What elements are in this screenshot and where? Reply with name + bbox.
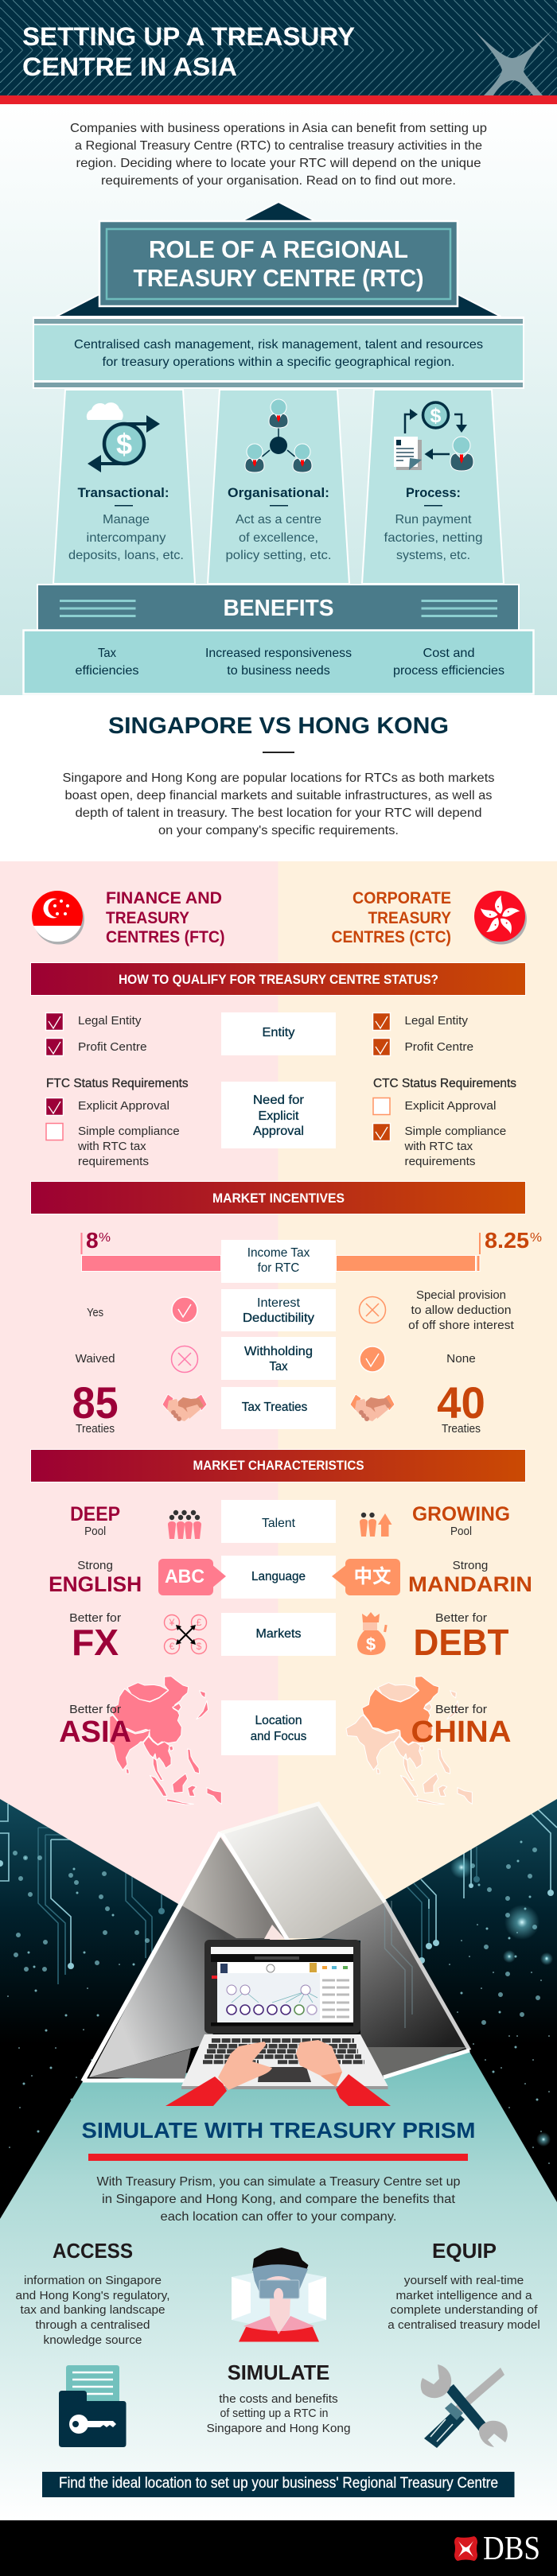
label box: need for explicit approval: Approval xyxy=(253,1125,304,1138)
row: interest deductibility xyxy=(87,1288,515,1332)
label box: entity: Entity xyxy=(263,1026,294,1039)
text block: equip xyxy=(388,2239,540,2332)
checklist: FTC status requirements: with RTC tax xyxy=(77,1140,146,1153)
row: language: MANDARIN xyxy=(408,1572,532,1596)
row: location and focus: Location xyxy=(255,1714,302,1727)
text block: comparison intro: boast open, deep financial markets and suitable infrastructures, as well as xyxy=(65,789,492,802)
panel: teal lower background xyxy=(0,2050,557,2520)
icon: process cycle xyxy=(394,402,473,471)
panel: role heading plaque: TREASURY CENTRE (RTC) xyxy=(134,265,423,292)
illustration: laptop with Treasury Prism dashboard xyxy=(166,1940,391,2106)
text block: equip: complete understanding of xyxy=(390,2303,538,2317)
panel: pillar transactional xyxy=(53,390,195,584)
checklist: CTC status requirements: requirements xyxy=(404,1155,476,1168)
bar chart: income tax Hong Kong 8.25% xyxy=(336,1228,542,1271)
row: interest deductibility: Special provision xyxy=(416,1288,506,1302)
row: tax treaties: Treaties xyxy=(76,1422,115,1436)
text block: access: through a centralised xyxy=(35,2318,150,2332)
panel: definition beam xyxy=(33,317,524,389)
row: location and focus: Better for xyxy=(435,1703,487,1716)
panel: pillar process: Run payment xyxy=(395,513,472,526)
label box: income tax: for RTC xyxy=(258,1261,299,1275)
icon: Chinese speech bubble: 中文 xyxy=(353,1565,391,1587)
checklist: Singapore entity xyxy=(46,1013,147,1056)
panel: pillar organisational xyxy=(208,390,349,584)
row: language: ENGLISH xyxy=(49,1572,142,1596)
heading: simulate with treasury prism: SIMULATE WITH TREASURY PRISM xyxy=(81,2118,476,2143)
heading: corporate treasury centres: TREASURY xyxy=(368,909,451,927)
icon: dollar exchange: $ xyxy=(116,428,132,460)
text block: simulate intro xyxy=(97,2175,461,2224)
label box: need for explicit approval: Explicit xyxy=(258,1109,299,1123)
heading: Singapore vs Hong Kong: SINGAPORE VS HONG KONG xyxy=(108,713,449,739)
Singapore flag badge xyxy=(32,891,84,945)
row: location and focus: Better for xyxy=(69,1703,121,1716)
label box: entity xyxy=(221,1012,336,1055)
header banner xyxy=(0,0,557,104)
text block: simulate intro: in Singapore and Hong Kong, and compare the benefits that xyxy=(102,2193,456,2206)
heading: corporate treasury centres: CORPORATE xyxy=(353,889,451,907)
bar chart: income tax Singapore 8% xyxy=(81,1228,221,1271)
checklist: Hong Kong entity: Profit Centre xyxy=(404,1040,473,1054)
icon: currency exchange: £ xyxy=(197,1617,202,1628)
call to action bar: Find the ideal location to set up your business' Regional Treasury Centre xyxy=(59,2475,498,2492)
row: interest deductibility: Interest xyxy=(257,1296,301,1310)
banner: how to qualify: HOW TO QUALIFY FOR TREASURY CENTRE STATUS? xyxy=(119,973,438,987)
title xyxy=(22,22,355,81)
bar chart: income tax Hong Kong 8.25%: 8.25 xyxy=(485,1228,529,1253)
text block: comparison intro: on your company's specific requirements. xyxy=(158,824,399,837)
text block: simulate: of setting up a RTC in xyxy=(220,2407,328,2420)
panel: benefits list: efficiencies xyxy=(75,664,138,678)
panel: benefits list: Cost and xyxy=(423,647,474,660)
panel: temple roof xyxy=(56,202,501,317)
text block: access: knowledge source xyxy=(43,2333,142,2347)
intro text: Companies with business operations in Asia can benefit from setting up xyxy=(70,122,487,135)
label box: income tax xyxy=(221,1240,336,1283)
row: talent: GROWING xyxy=(412,1503,510,1525)
icon: DBS star mark xyxy=(470,26,556,95)
icon: dollar exchange xyxy=(87,402,160,472)
panel: role heading plaque xyxy=(99,221,458,306)
row: tax treaties: Tax Treaties xyxy=(242,1401,307,1414)
row: language xyxy=(49,1556,532,1599)
row: interest deductibility: Yes xyxy=(87,1306,103,1319)
panel: pillar transactional: Transactional: xyxy=(78,485,169,500)
heading: corporate treasury centres xyxy=(331,889,451,946)
row: language: Strong xyxy=(453,1559,488,1572)
row: location and focus: ASIA xyxy=(59,1715,131,1749)
icon: ABC speech bubble xyxy=(158,1559,226,1595)
text block: equip: EQUIP xyxy=(432,2239,497,2263)
text block: simulate: Singapore and Hong Kong xyxy=(207,2422,350,2435)
bar chart: income tax Singapore 8%: % xyxy=(99,1231,111,1245)
row: withholding tax xyxy=(76,1337,476,1380)
intro text: requirements of your organisation. Read on to find out more. xyxy=(101,174,456,188)
row: markets: Better for xyxy=(435,1611,487,1625)
icon: folder with key xyxy=(59,2365,126,2447)
row: location and focus: and Focus xyxy=(251,1730,306,1743)
map: Asia, Singapore focus xyxy=(110,1676,222,1805)
banner: market characteristics xyxy=(30,1449,525,1482)
icon: deep talent pool xyxy=(168,1510,201,1539)
logo: DBS: DBS xyxy=(483,2531,540,2567)
text block: access: ACCESS xyxy=(53,2239,133,2263)
row: markets: Markets xyxy=(256,1627,301,1641)
panel: benefits list: process efficiencies xyxy=(393,664,504,678)
heading: finance and treasury centres xyxy=(106,889,224,946)
banner: market characteristics: MARKET CHARACTERISTICS xyxy=(193,1459,364,1473)
row: tax treaties: Treaties xyxy=(442,1422,481,1436)
row: interest deductibility: to allow deduction xyxy=(411,1304,511,1317)
icon: currency exchange xyxy=(164,1614,207,1654)
icon: currency exchange: € xyxy=(169,1641,175,1652)
panel: definition beam: for treasury operations within a specific geographical region. xyxy=(102,356,455,369)
panel: pillar process xyxy=(362,390,504,584)
map: Asia, China focus xyxy=(346,1677,472,1805)
panel: pillar process: systems, etc. xyxy=(396,549,470,562)
panel: dark simulation background with circuits and stars xyxy=(0,1793,557,2239)
text block: equip: market intelligence and a xyxy=(396,2289,532,2302)
checklist: CTC status requirements: Explicit Approval xyxy=(404,1099,497,1113)
circuit lines xyxy=(38,1828,477,1984)
text block: comparison intro xyxy=(62,771,495,837)
text block: simulate intro: each location can offer to your company. xyxy=(161,2210,396,2224)
icon: wrench and screwdriver xyxy=(421,2364,508,2448)
panel: pillar process: factories, netting xyxy=(384,531,482,545)
text block: equip: yourself with real-time xyxy=(404,2274,524,2287)
row: talent: DEEP xyxy=(70,1503,120,1525)
banner: market incentives xyxy=(30,1182,525,1214)
row: withholding tax: Waived xyxy=(76,1352,115,1366)
text block: comparison intro: Singapore and Hong Kong are popular locations for RTCs as both markets xyxy=(62,771,495,785)
checklist: CTC status requirements: with RTC tax xyxy=(403,1140,473,1153)
intro text: a Regional Treasury Centre (RTC) to centralise treasury activities in the xyxy=(75,139,482,153)
checklist: FTC status requirements: Explicit Approval xyxy=(78,1099,169,1113)
text block: equip: a centralised treasury model xyxy=(388,2318,540,2332)
logo: DBS xyxy=(454,2531,540,2567)
checklist: Hong Kong entity: Legal Entity xyxy=(404,1014,469,1028)
laptop screen xyxy=(204,1940,360,2034)
heading: finance and treasury centres: CENTRES (FTC) xyxy=(106,928,224,946)
panel: pillar organisational: Organisational: xyxy=(228,485,329,500)
panel: benefits bar: BENEFITS xyxy=(223,596,334,621)
row: language: Strong xyxy=(77,1559,113,1572)
checklist: CTC status requirements: Simple compliance xyxy=(404,1125,506,1138)
checklist: Hong Kong entity xyxy=(372,1013,473,1056)
text block: access: and Hong Kong's regulatory, xyxy=(16,2289,170,2302)
title: CENTRE IN ASIA xyxy=(22,52,237,81)
panel: benefits list: Increased responsiveness xyxy=(205,647,352,660)
row: tax treaties xyxy=(72,1377,485,1436)
row: markets: Better for xyxy=(69,1611,121,1625)
row: tax treaties: 85 xyxy=(72,1377,119,1428)
row: withholding tax: Tax xyxy=(269,1360,288,1373)
checklist: FTC status requirements: requirements xyxy=(78,1155,149,1168)
text block: comparison intro: depth of talent in treasury. The best location for your RTC will depend xyxy=(75,806,482,820)
row: talent xyxy=(70,1500,510,1543)
heading: simulate with treasury prism xyxy=(81,2118,476,2161)
row: markets xyxy=(69,1611,509,1663)
panel: definition beam: Centralised cash management, risk management, talent and resources xyxy=(74,338,483,352)
panel: pillar transactional: intercompany xyxy=(86,531,166,545)
row: markets: FX xyxy=(72,1622,119,1663)
panel: pillar transactional: Manage xyxy=(103,513,150,526)
text block: access: information on Singapore xyxy=(24,2274,162,2287)
row: language: Language xyxy=(251,1570,306,1583)
text block: simulate: the costs and benefits xyxy=(219,2392,338,2406)
bar chart: income tax Singapore 8%: 8 xyxy=(86,1228,99,1253)
panel: pillar organisational: policy setting, etc. xyxy=(226,549,331,562)
icon: handshake xyxy=(162,1394,207,1421)
text block: simulate xyxy=(207,2360,350,2435)
icon: currency exchange: ¥ xyxy=(169,1617,175,1628)
intro text xyxy=(70,122,487,188)
text block: simulate: SIMULATE xyxy=(228,2360,329,2384)
row: interest deductibility: Deductibility xyxy=(243,1311,314,1325)
row: talent: Talent xyxy=(262,1517,296,1530)
checklist: FTC status requirements: Simple compliance xyxy=(78,1125,180,1138)
row: markets: DEBT xyxy=(414,1622,509,1663)
icon: process cycle: $ xyxy=(430,405,442,427)
checklist: Singapore entity: Legal Entity xyxy=(78,1014,142,1028)
row: withholding tax: Withholding xyxy=(244,1345,313,1358)
row: location and focus: CHINA xyxy=(411,1715,511,1749)
text block: access xyxy=(16,2239,170,2347)
heading: finance and treasury centres: FINANCE AND xyxy=(106,889,222,907)
label box: income tax: Income Tax xyxy=(247,1246,310,1260)
icon: handshake xyxy=(350,1394,395,1421)
row: talent: Pool xyxy=(84,1525,106,1538)
icon: organisation network xyxy=(245,399,312,472)
icon: growing talent pool xyxy=(360,1513,391,1537)
panel: pillar organisational: of excellence, xyxy=(239,531,318,545)
label box: need for explicit approval: Need for xyxy=(253,1094,305,1107)
panel: pillar organisational: Act as a centre xyxy=(236,513,321,526)
section background: role of RTC xyxy=(0,104,557,695)
panel: pillar process: Process: xyxy=(406,485,461,500)
icon: money bag: $ xyxy=(366,1634,376,1654)
panel: benefits list xyxy=(24,630,533,694)
icon: money bag xyxy=(357,1612,388,1655)
icon: Chinese speech bubble xyxy=(332,1559,400,1595)
panel: benefits bar xyxy=(37,585,519,631)
banner: market incentives: MARKET INCENTIVES xyxy=(212,1191,345,1206)
Hong Kong flag badge xyxy=(474,891,527,945)
row: withholding tax: None xyxy=(446,1352,476,1366)
sleeves xyxy=(166,2077,227,2106)
intro text: region. Deciding where to locate your RTC will depend on the unique xyxy=(76,157,481,170)
stars xyxy=(15,1850,538,2022)
laptop base xyxy=(181,2086,388,2089)
checklist: Singapore entity: Profit Centre xyxy=(78,1040,147,1054)
row: location and focus xyxy=(59,1700,512,1755)
checklist: CTC status requirements: CTC Status Requirements xyxy=(373,1077,516,1090)
panel: benefits list: Tax xyxy=(98,647,116,660)
row: interest deductibility: of off shore interest xyxy=(408,1319,515,1332)
bar chart: income tax Hong Kong 8.25%: % xyxy=(530,1231,542,1245)
checklist: CTC status requirements xyxy=(372,1077,516,1168)
panel: benefits list: to business needs xyxy=(227,664,330,678)
banner: how to qualify xyxy=(30,962,525,996)
text block: simulate intro: With Treasury Prism, you can simulate a Treasury Centre set up xyxy=(97,2175,461,2189)
icon: currency exchange: $ xyxy=(197,1641,202,1652)
call to action bar xyxy=(42,2472,514,2497)
illustration: prism xyxy=(83,1803,469,2081)
icon: ABC speech bubble: ABC xyxy=(165,1566,204,1587)
checklist: FTC status requirements xyxy=(46,1077,189,1168)
panel: role heading plaque: ROLE OF A REGIONAL xyxy=(149,236,408,263)
hands xyxy=(218,2042,272,2090)
title: SETTING UP A TREASURY xyxy=(22,22,355,51)
footer xyxy=(0,2520,557,2576)
panel: Singapore column background xyxy=(0,861,278,1941)
icon: person in VR headset xyxy=(232,2248,326,2341)
heading: corporate treasury centres: CENTRES (CTC) xyxy=(331,928,451,946)
label box: need for explicit approval xyxy=(221,1082,336,1148)
row: tax treaties: 40 xyxy=(437,1377,485,1428)
checklist: FTC status requirements: FTC Status Requirements xyxy=(46,1077,189,1090)
text block: access: tax and banking landscape xyxy=(21,2303,166,2317)
heading: finance and treasury centres: TREASURY xyxy=(106,909,189,927)
panel: Hong Kong column background xyxy=(278,861,557,1941)
row: talent: Pool xyxy=(450,1525,472,1538)
panel: pillar transactional: deposits, loans, etc. xyxy=(68,549,184,562)
